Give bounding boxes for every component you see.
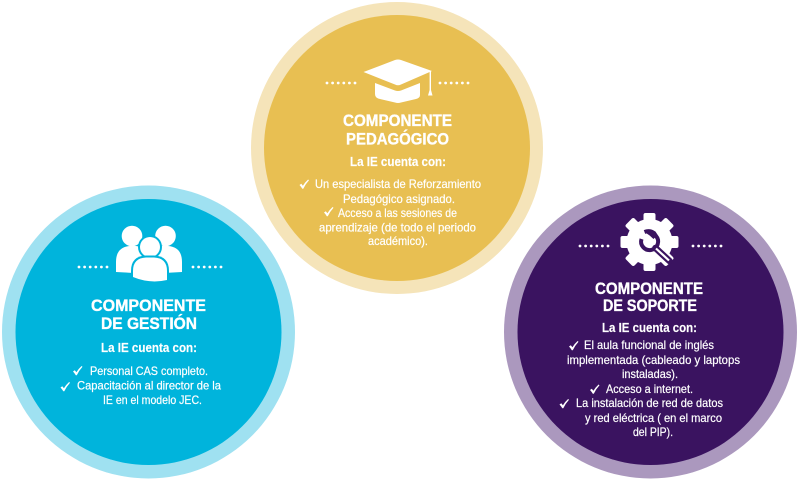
panel: componente pedagógico xyxy=(251,2,543,294)
text block: Pedagógico asignado. xyxy=(343,192,455,206)
panel: componente de gestión: DE GESTIÓN xyxy=(101,314,197,333)
text block: Acceso a internet. xyxy=(606,382,693,396)
text block: del PIP). xyxy=(633,425,673,439)
heading: COMPONENTE xyxy=(595,279,703,298)
text block: y red eléctrica ( en el marco xyxy=(585,411,722,425)
text block: Personal CAS completo. xyxy=(90,364,208,378)
text block: La instalación de red de datos xyxy=(576,396,723,410)
text block: Un especialista de Reforzamiento xyxy=(315,177,481,191)
text block: IE en el modelo JEC. xyxy=(103,393,202,407)
dotted line left xyxy=(78,266,108,268)
icon: people xyxy=(116,226,182,284)
dotted line right xyxy=(692,245,722,247)
subheading: La IE cuenta con: xyxy=(101,341,197,355)
dotted line right xyxy=(439,82,469,84)
dotted line left xyxy=(579,245,609,247)
text block: aprendizaje (de todo el periodo xyxy=(319,220,476,234)
text block xyxy=(315,177,481,248)
panel: componente pedagógico: PEDAGÓGICO xyxy=(346,130,449,148)
purple circle xyxy=(504,186,797,478)
text block: El aula funcional de inglés xyxy=(584,338,714,352)
text block: Capacitación al director de la xyxy=(77,378,221,392)
check icons xyxy=(60,366,82,391)
dotted line left xyxy=(326,82,356,84)
text block xyxy=(567,338,740,439)
text block: académico). xyxy=(368,234,428,248)
subheading: La IE cuenta con: xyxy=(602,321,697,335)
dotted line right xyxy=(192,266,222,268)
panel: componente de gestión xyxy=(2,186,295,478)
yellow circle xyxy=(251,2,543,294)
text block: implementada (cableado y laptops xyxy=(567,353,740,367)
text block: instaladas). xyxy=(622,367,678,381)
blue circle xyxy=(2,186,295,478)
icon: gear and wrench xyxy=(620,213,678,271)
panel: componente de soporte: DE SOPORTE xyxy=(603,296,697,315)
check icons xyxy=(300,180,334,216)
subheading: La IE cuenta con: xyxy=(350,155,446,169)
text block xyxy=(77,364,221,407)
heading: COMPONENTE xyxy=(91,296,206,315)
text block: Acceso a las sesiones de xyxy=(338,206,457,220)
icon: graduation cap xyxy=(364,60,432,103)
check icons xyxy=(560,341,600,408)
panel: componente de soporte xyxy=(504,186,797,478)
heading: COMPONENTE xyxy=(343,111,452,130)
